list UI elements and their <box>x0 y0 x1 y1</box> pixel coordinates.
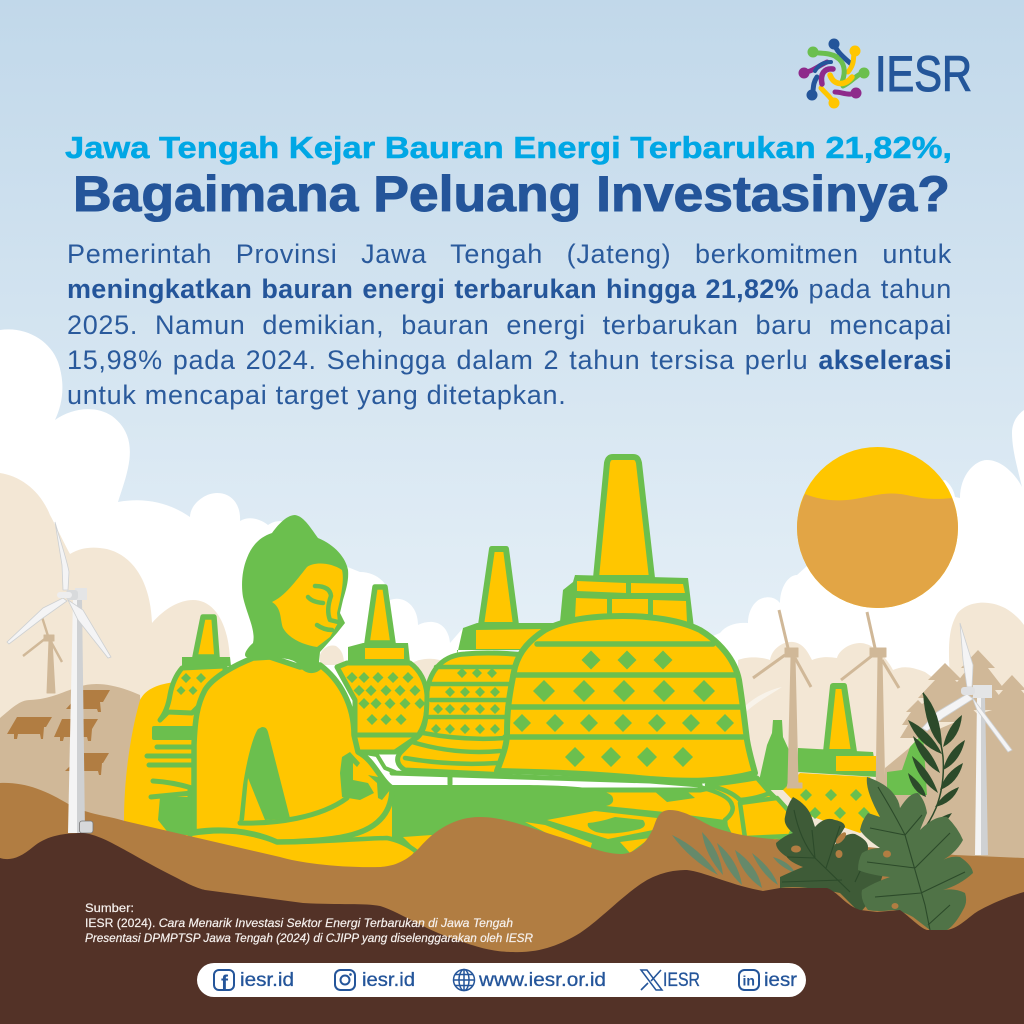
white foreground wind turbine: right <box>922 623 1012 855</box>
beige hills and distant clouds <box>0 473 1024 870</box>
intro paragraph <box>67 239 952 410</box>
paragraph line 4: 15,98% pada 2024. Sehingga dalam 2 tahun tersisa perlu akselerasi <box>67 345 952 375</box>
website: www.iesr.or.id <box>478 969 606 991</box>
facebook <box>214 969 294 995</box>
yellow body behind Buddha <box>124 682 210 850</box>
Buddha hands <box>340 752 374 800</box>
robe arm drape <box>239 727 290 823</box>
white pill <box>197 963 806 997</box>
monstera leaf: dark <box>776 797 883 913</box>
white clouds <box>0 329 1024 900</box>
linkedin: iesr <box>764 969 798 991</box>
Buddha face <box>272 564 343 647</box>
turbine: centre right <box>753 610 811 788</box>
Buddha body <box>194 657 392 842</box>
logo mark: spiral <box>798 38 870 108</box>
monstera leaf: light <box>858 777 973 931</box>
social media bar <box>197 963 806 997</box>
distant turbines in front of stupa <box>753 610 899 800</box>
lower lap <box>190 831 417 875</box>
solar panel 1 <box>66 690 110 712</box>
temple base platform <box>190 778 797 850</box>
source line 1: IESR (2024). Cara Menarik Investasi Sektor Energi Terbarukan di Jawa Tengah <box>85 916 513 930</box>
linkedin: in <box>742 972 755 988</box>
dark brown ground <box>0 833 1024 1024</box>
right small stupa <box>757 686 927 833</box>
linkedin <box>739 969 798 991</box>
face features <box>308 586 342 630</box>
solar panel 2 <box>7 717 52 739</box>
far-left small turbine <box>23 617 62 693</box>
logo wordmark: IESR <box>875 46 972 102</box>
X: IESR <box>663 969 700 991</box>
paragraph line 5: untuk mencapai target yang ditetapkan. <box>67 380 566 410</box>
source label: Sumber: <box>85 901 134 915</box>
instagram: iesr.id <box>362 969 415 991</box>
temple and Buddha illustration <box>124 457 797 875</box>
tan hills <box>0 684 1024 870</box>
instagram <box>335 969 415 991</box>
pine trees <box>900 650 1024 738</box>
X <box>641 969 700 991</box>
paragraph line 1: Pemerintah Provinsi Jawa Tengah (Jateng) berkomitmen untuk <box>67 239 952 269</box>
IESR logo <box>798 38 972 108</box>
title line 2: Bagaimana Peluang Investasinya? <box>73 166 950 222</box>
big central stupa <box>497 457 755 781</box>
source line 2: Presentasi DPMPTSP Jawa Tengah (2024) di CJIPP yang diselenggarakan oleh IESR <box>85 931 533 945</box>
solar panels <box>7 690 110 775</box>
palm branch <box>908 692 965 832</box>
white foreground wind turbine: left <box>7 522 111 833</box>
solar panel 3 <box>54 719 98 741</box>
source note <box>85 901 533 945</box>
middle stupa <box>398 549 565 775</box>
solar panel 4 <box>65 753 109 775</box>
Buddha head and neck <box>242 515 348 673</box>
turbine: right <box>841 612 899 800</box>
right-of-Buddha stupa <box>337 587 427 752</box>
title line 1: Jawa Tengah Kejar Bauran Energi Terbarukan 21,82%, <box>65 130 952 165</box>
Buddha statue <box>190 515 417 875</box>
main title <box>65 130 952 222</box>
facebook: iesr.id <box>240 969 294 991</box>
faded leaves on hill <box>672 832 795 888</box>
base terraces <box>280 773 797 860</box>
paragraph line 3: 2025. Namun demikian, bauran energi terbarukan baru mencapai <box>67 310 952 340</box>
sun <box>797 447 958 608</box>
facebook: f <box>221 972 229 995</box>
left small stupa <box>147 617 231 835</box>
paragraph line 2: meningkatkan bauran energi terbarukan hingga 21,82% pada tahun <box>67 274 952 304</box>
brown foreground hill <box>0 783 1024 1024</box>
